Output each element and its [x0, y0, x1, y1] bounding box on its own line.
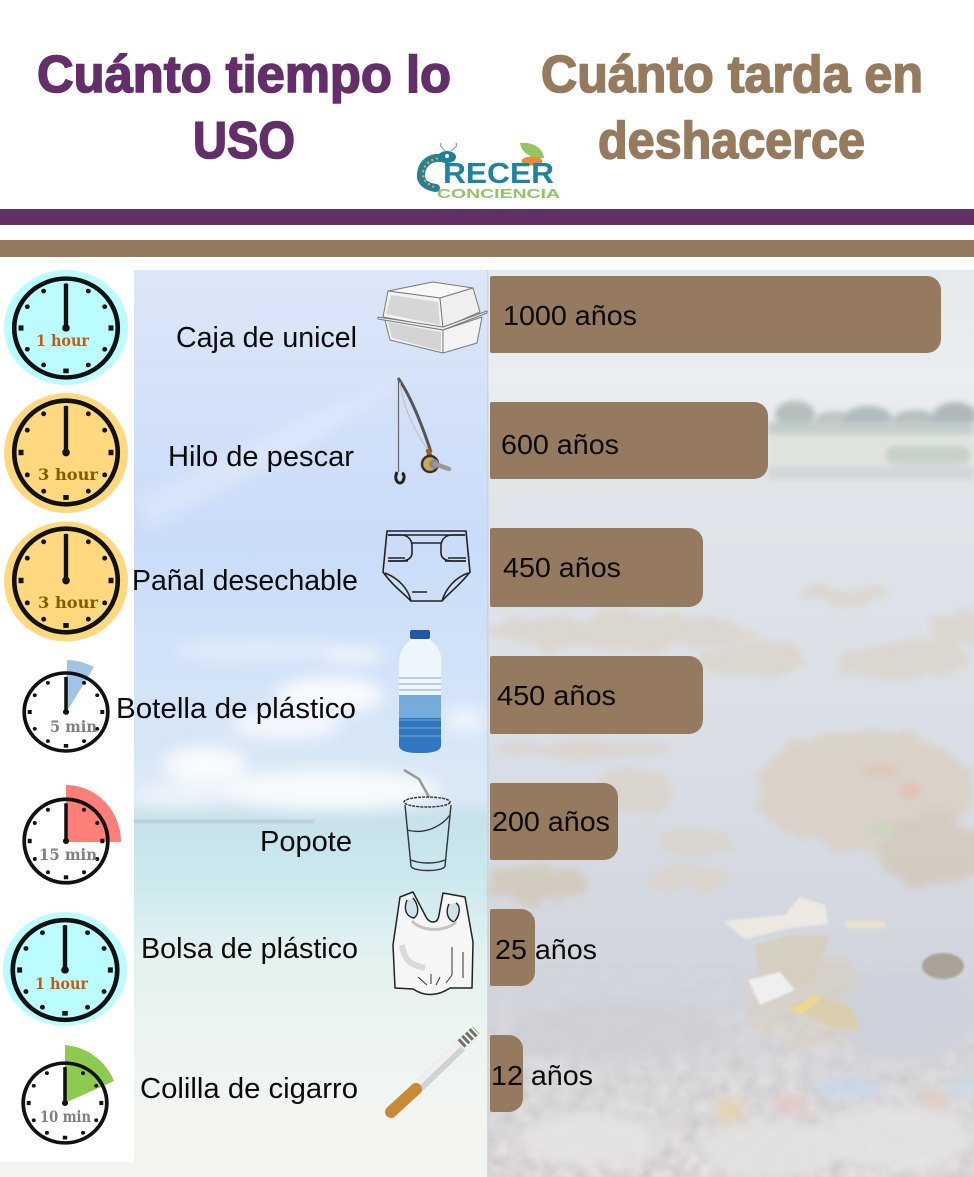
panel: polluted water background [487, 270, 974, 1177]
logo: Crecer Conciencia: CONCIENCIA [437, 187, 560, 201]
logo: Crecer Conciencia [421, 143, 560, 201]
clock: 3 hour, hilo [4, 393, 128, 513]
title: Cuánto tarda en deshacerce [541, 46, 923, 170]
icon: fishing rod [396, 378, 449, 483]
clock: 15 min, popote: 15 min [39, 845, 97, 864]
icon: plastic bag [393, 892, 473, 995]
clock: 3 hour, hilo: 3 hour [38, 465, 99, 484]
clock: 3 hour, pañal [4, 522, 128, 642]
title: Cuánto tiempo lo USO [37, 46, 451, 170]
panel: white clock column edge [487, 270, 488, 1177]
clock: 1 hour, caja: 1 hour [36, 331, 90, 350]
title: Cuánto tiempo lo USO: USO [193, 112, 295, 170]
icon: foam box [378, 282, 487, 353]
title: Cuánto tarda en deshacerce: Cuánto tarda en [541, 46, 923, 104]
clock: 3 hour, pañal: 3 hour [38, 593, 99, 612]
clock: 10 min, colilla [23, 1045, 114, 1143]
label: Bolsa de plástico: Bolsa de plástico [141, 933, 358, 965]
purple divider band [0, 209, 974, 225]
bar: 1000 años: 1000 años [503, 300, 637, 331]
clock: 1 hour, bolsa [3, 912, 127, 1026]
bar: 450 años, pañal [490, 528, 703, 607]
bar: 12 años [490, 1035, 593, 1112]
clock: 10 min, colilla: 10 min [40, 1107, 91, 1126]
label: Popote: Popote [260, 826, 352, 858]
bar: 200 años [490, 783, 618, 860]
label: Botella de plástico: Botella de plástico [116, 693, 356, 725]
icon: cup with straw [404, 770, 451, 870]
bar: 1000 años [490, 276, 941, 353]
bar: 450 años, botella: 450 años [497, 680, 616, 711]
panel: beach sky background [0, 270, 488, 1177]
clock: 5 min, botella: 5 min [50, 717, 97, 736]
brown divider band [0, 240, 974, 257]
bar: 600 años: 600 años [501, 429, 619, 460]
bar: 25 años [490, 909, 597, 986]
label: Pañal desechable: Pañal desechable [132, 565, 358, 597]
clock: 5 min, botella [24, 660, 108, 751]
clock: 15 min, popote [24, 785, 121, 883]
clock: 1 hour, caja [4, 270, 128, 385]
bar: 450 años, pañal: 450 años [503, 552, 621, 583]
label: Caja de unicel: Caja de unicel [176, 322, 357, 354]
icon: diaper [383, 531, 470, 601]
bar: 600 años [490, 402, 768, 479]
icon: cigarette [391, 1030, 476, 1112]
bar: 25 años: 25 años [495, 934, 597, 965]
label: Hilo de pescar: Hilo de pescar [168, 441, 354, 473]
title: Cuánto tarda en deshacerce: deshacerce [598, 112, 865, 170]
label: Colilla de cigarro: Colilla de cigarro [140, 1073, 358, 1105]
title: Cuánto tiempo lo USO: Cuánto tiempo lo [37, 46, 451, 104]
bar: 200 años: 200 años [492, 806, 610, 837]
bar: 450 años, botella [490, 656, 703, 734]
bar: 12 años: 12 años [491, 1060, 593, 1091]
clock: 1 hour, bolsa: 1 hour [35, 974, 89, 993]
logo: Crecer Conciencia: RECER [443, 158, 554, 190]
icon: water bottle [399, 630, 441, 753]
